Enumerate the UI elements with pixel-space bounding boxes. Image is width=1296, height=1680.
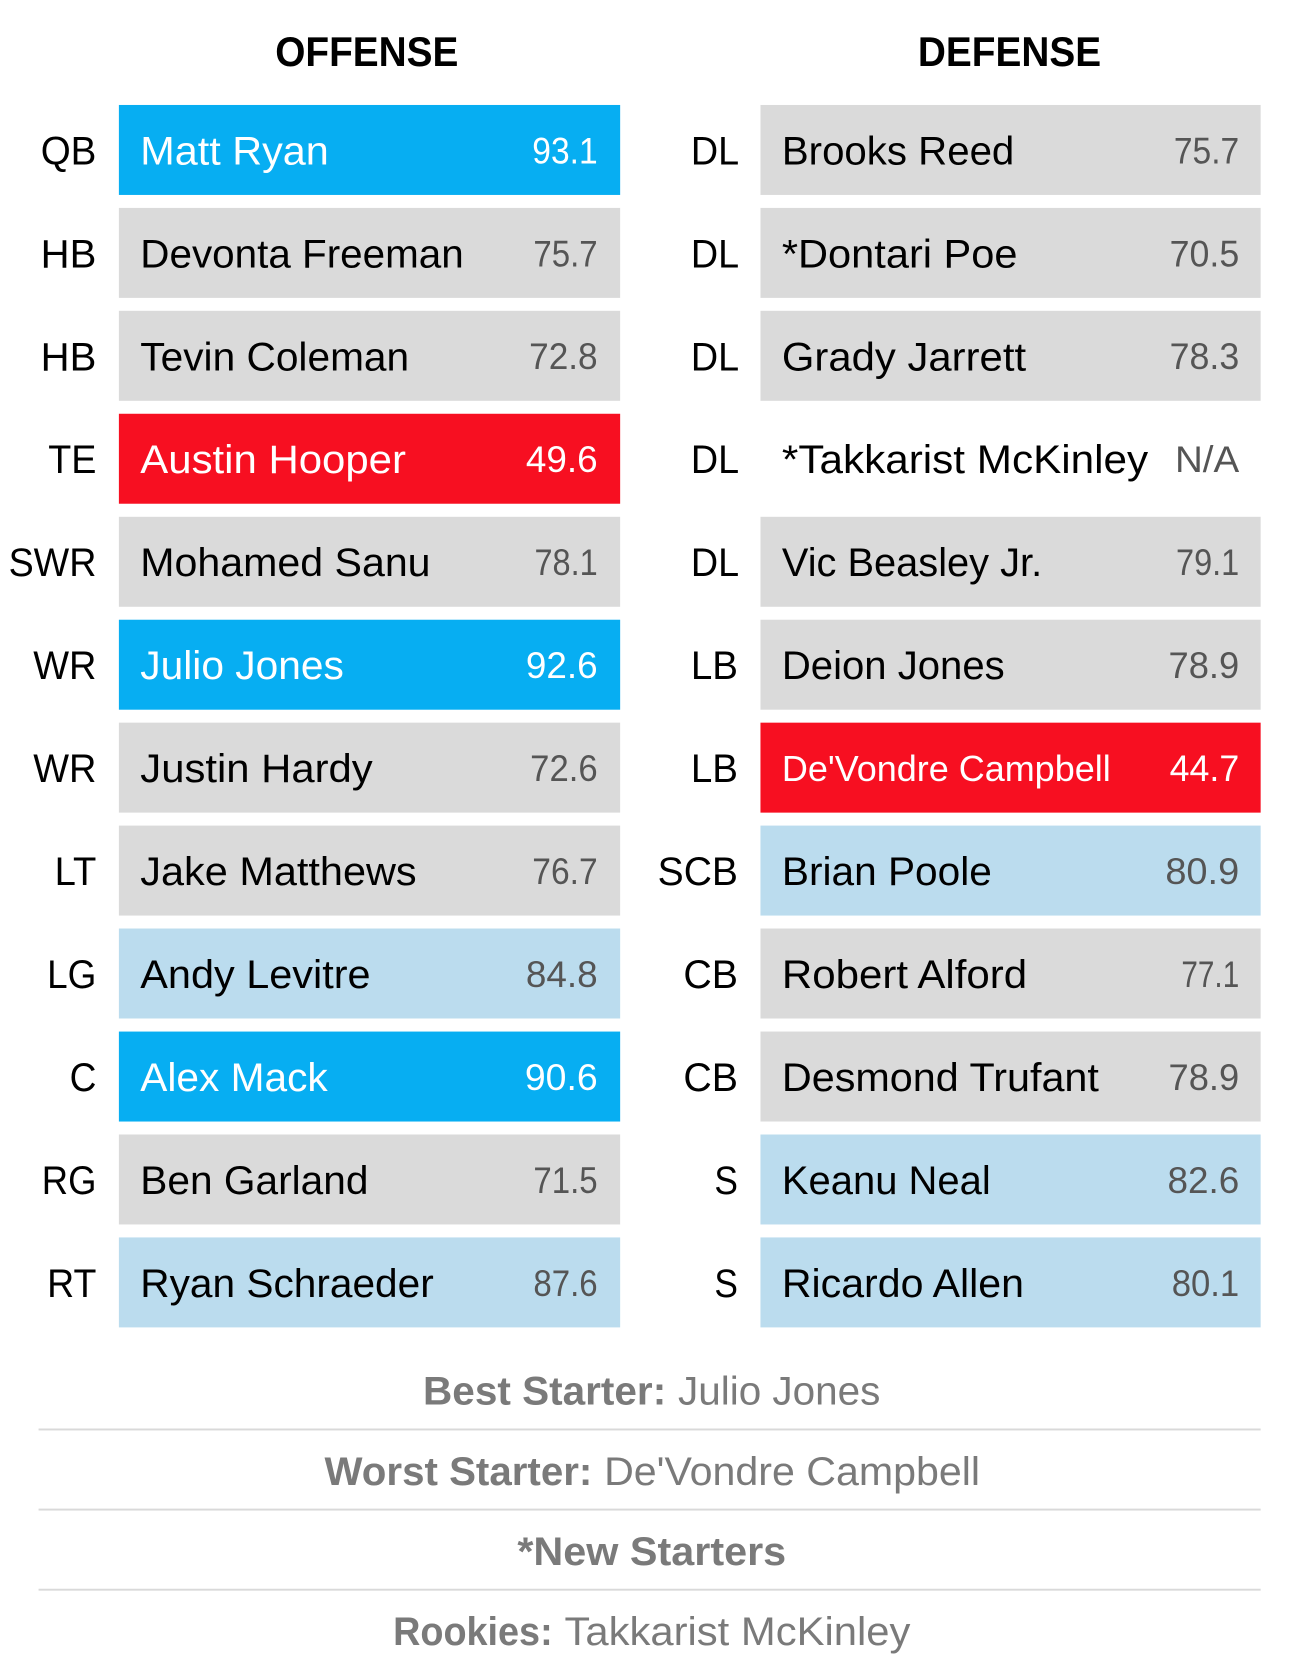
row: RT Ryan Schraeder: 87.6 (533, 1263, 598, 1304)
row: DL Brooks Reed: 75.7 (1174, 130, 1239, 171)
row: S Keanu Neal: S (714, 1158, 738, 1203)
row: WR Julio Jones (33, 620, 620, 710)
row: DL Grady Jarrett: 78.3 (1170, 336, 1239, 377)
row: DL Brooks Reed: DL (691, 128, 739, 173)
row: S Keanu Neal: Keanu Neal (782, 1158, 991, 1203)
row: DL Dontari Poe: DL (691, 231, 739, 276)
row: WR Julio Jones: Julio Jones (140, 643, 344, 688)
row: LG Andy Levitre: LG (47, 952, 96, 997)
row: CB Desmond Trufant (683, 1032, 1261, 1122)
row: LT Jake Matthews (55, 826, 620, 916)
row: TE Austin Hooper (48, 414, 620, 504)
row: HB Tevin Coleman: 72.8 (529, 336, 598, 377)
row: SWR Mohamed Sanu: SWR (9, 540, 96, 585)
heading: offense: OFFENSE (275, 28, 458, 75)
row: DL Takkarist McKinley: N/A (1175, 439, 1240, 480)
row: CB Desmond Trufant: 78.9 (1169, 1057, 1239, 1098)
row: S Ricardo Allen: S (714, 1261, 738, 1306)
row: HB Devonta Freeman: Devonta Freeman (140, 231, 464, 276)
row: DL Dontari Poe: *Dontari Poe (782, 231, 1018, 276)
note: best starter (423, 1369, 880, 1414)
note: worst starter: De'Vondre Campbell (604, 1449, 980, 1494)
heading: defense: DEFENSE (918, 28, 1101, 75)
row: CB Robert Alford (683, 929, 1261, 1018)
row: LT Jake Matthews: Jake Matthews (140, 849, 417, 894)
row: C Alex Mack: 90.6 (525, 1057, 598, 1098)
row: S Ricardo Allen (714, 1237, 1261, 1327)
footer notes (39, 1369, 1261, 1654)
row: RG Ben Garland (42, 1134, 620, 1224)
row: WR Justin Hardy: WR (33, 746, 96, 791)
row: HB Tevin Coleman (41, 311, 620, 401)
row: DL Grady Jarrett (691, 311, 1261, 401)
row: DL Vic Beasley Jr.: DL (691, 540, 739, 585)
row: HB Devonta Freeman: 75.7 (533, 233, 598, 274)
note: worst starter (325, 1449, 980, 1494)
row: RT Ryan Schraeder: RT (47, 1261, 96, 1306)
row: LB Deion Jones: 78.9 (1169, 645, 1239, 686)
row: LG Andy Levitre (47, 929, 620, 1018)
row: LB Deion Jones (691, 620, 1261, 710)
row: DL Dontari Poe (691, 208, 1261, 298)
row: QB Matt Ryan: Matt Ryan (140, 128, 329, 173)
row: QB Matt Ryan: QB (41, 128, 96, 173)
row: WR Justin Hardy: Justin Hardy (140, 746, 373, 791)
row: DL Grady Jarrett: Grady Jarrett (782, 334, 1026, 379)
row: LG Andy Levitre: 84.8 (526, 954, 598, 995)
row: RG Ben Garland: Ben Garland (140, 1158, 368, 1203)
row: C Alex Mack: Alex Mack (140, 1055, 329, 1100)
row: DL Takkarist McKinley: *Takkarist McKinley (782, 437, 1148, 482)
row: LB Deion Jones: LB (691, 643, 738, 688)
row: LT Jake Matthews: 76.7 (532, 851, 598, 892)
row: LB De'Vondre Campbell: 44.7 (1170, 748, 1239, 789)
row: DL Brooks Reed (691, 105, 1261, 195)
row: SCB Brian Poole (658, 826, 1261, 916)
note: rookies: Takkarist McKinley (564, 1609, 910, 1654)
row: LG Andy Levitre: Andy Levitre (140, 952, 371, 997)
row: WR Julio Jones: WR (33, 643, 96, 688)
row: DL Vic Beasley Jr.: Vic Beasley Jr. (782, 540, 1042, 585)
note: best starter: Julio Jones (678, 1369, 880, 1414)
row: LT Jake Matthews: LT (55, 849, 96, 894)
row: DL Takkarist McKinley: DL (691, 437, 739, 482)
row: CB Robert Alford: CB (683, 952, 738, 997)
row: CB Robert Alford: 77.1 (1181, 954, 1239, 995)
row: DL Vic Beasley Jr. (691, 517, 1261, 607)
row: SWR Mohamed Sanu: Mohamed Sanu (140, 540, 431, 585)
row: LB De'Vondre Campbell: De'Vondre Campbell (782, 748, 1111, 789)
row: DL Grady Jarrett: DL (691, 334, 739, 379)
note: best starter: Best Starter: (423, 1369, 666, 1414)
row: TE Austin Hooper: TE (48, 437, 96, 482)
note: worst starter: Worst Starter: (325, 1449, 592, 1494)
row: SCB Brian Poole: 80.9 (1165, 851, 1239, 892)
row: RG Ben Garland: 71.5 (533, 1160, 598, 1201)
row: DL Dontari Poe: 70.5 (1170, 233, 1239, 274)
row: LB Deion Jones: Deion Jones (782, 643, 1005, 688)
row: DL Vic Beasley Jr.: 79.1 (1176, 542, 1239, 583)
row: WR Julio Jones: 92.6 (526, 645, 598, 686)
row: S Keanu Neal (714, 1134, 1261, 1224)
row: RT Ryan Schraeder: Ryan Schraeder (140, 1261, 434, 1306)
row: LB De'Vondre Campbell: LB (691, 746, 738, 791)
row: CB Desmond Trufant: Desmond Trufant (782, 1055, 1099, 1100)
row: S Keanu Neal: 82.6 (1167, 1160, 1239, 1201)
row: HB Tevin Coleman: HB (41, 334, 96, 379)
note: rookies (393, 1609, 910, 1654)
note: rookies: Rookies: (393, 1609, 553, 1654)
row: TE Austin Hooper: Austin Hooper (140, 437, 406, 482)
row: RT Ryan Schraeder (47, 1237, 620, 1327)
row: QB Matt Ryan (41, 105, 620, 195)
row: CB Desmond Trufant: CB (683, 1055, 738, 1100)
row: C Alex Mack (70, 1032, 620, 1122)
row: SWR Mohamed Sanu: 78.1 (534, 542, 598, 583)
row: DL Takkarist McKinley (691, 437, 1240, 482)
row: WR Justin Hardy: 72.6 (530, 748, 598, 789)
row: SWR Mohamed Sanu (9, 517, 620, 607)
row: CB Robert Alford: Robert Alford (782, 952, 1027, 997)
panel: defense roster (658, 105, 1261, 1327)
row: S Ricardo Allen: 80.1 (1172, 1263, 1239, 1304)
row: QB Matt Ryan: 93.1 (532, 130, 598, 171)
row: TE Austin Hooper: 49.6 (526, 439, 598, 480)
panel: offense roster (9, 105, 620, 1327)
row: LB De'Vondre Campbell (691, 723, 1261, 813)
row: HB Devonta Freeman (41, 208, 620, 298)
row: DL Brooks Reed: Brooks Reed (782, 128, 1014, 173)
note: new starters: *New Starters (517, 1529, 786, 1574)
row: SCB Brian Poole: SCB (658, 849, 738, 894)
row: C Alex Mack: C (70, 1055, 96, 1100)
row: S Ricardo Allen: Ricardo Allen (782, 1261, 1024, 1306)
row: WR Justin Hardy (33, 723, 620, 813)
row: SCB Brian Poole: Brian Poole (782, 849, 992, 894)
row: HB Tevin Coleman: Tevin Coleman (140, 334, 409, 379)
row: RG Ben Garland: RG (42, 1158, 96, 1203)
row: HB Devonta Freeman: HB (41, 231, 96, 276)
